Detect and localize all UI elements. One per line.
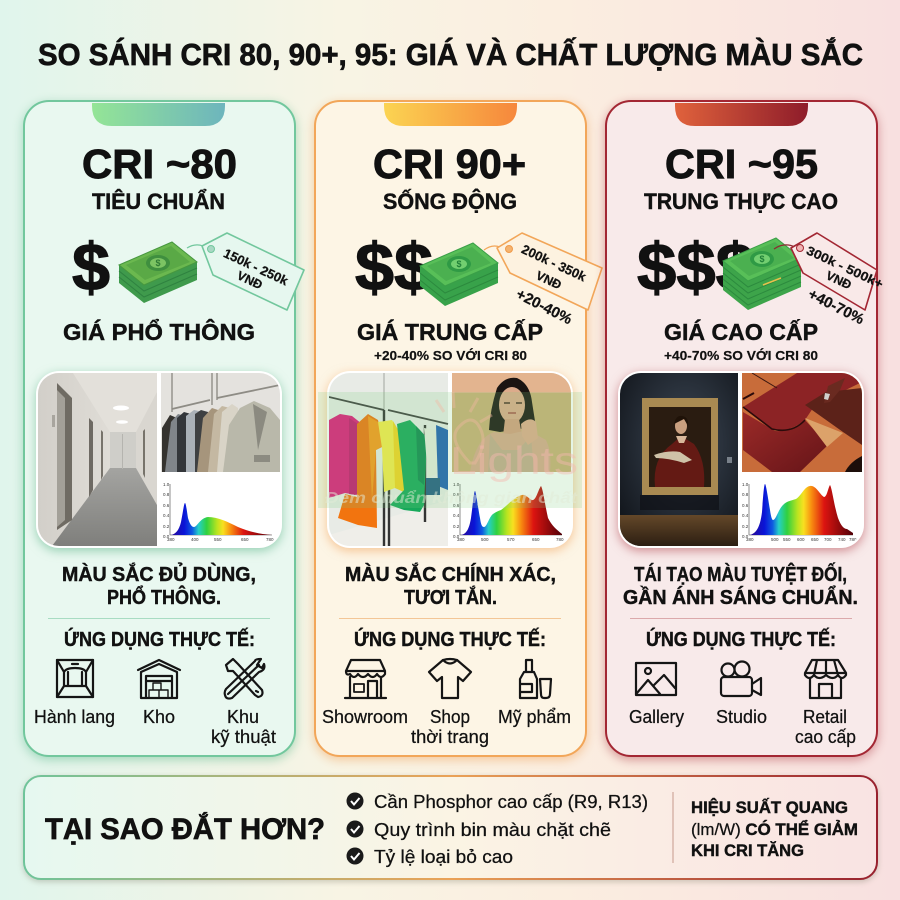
price level: GIÁ CAO CẤP	[664, 318, 818, 345]
card background	[606, 101, 877, 756]
title: SO SÁNH CRI 80, 90+, 95: GIÁ VÀ CHẤT LƯỢNG MÀU SẮC	[38, 36, 863, 72]
label: premium retail	[795, 707, 856, 747]
price tag: VNĐ	[235, 268, 265, 292]
icon: tools	[225, 659, 264, 699]
chart: CRI 95 spectrum: 380	[746, 537, 754, 542]
label: warehouse: Kho	[143, 707, 175, 727]
efficiency note: HIỆU SUẤT QUANG	[691, 798, 848, 817]
description: TÁI TẠO MÀU TUYỆT ĐỐI,	[634, 562, 847, 586]
chart: CRI 95 spectrum: 1.0	[742, 482, 749, 487]
chart: CRI 95 spectrum: 700	[824, 537, 832, 542]
comparison note: +20-40% SO VỚI CRI 80	[374, 348, 527, 363]
check item 3: Tỷ lệ loại bỏ cao	[374, 847, 513, 867]
comparison note: +40-70% SO VỚI CRI 80	[664, 348, 818, 363]
efficiency note: (lm/W) CÓ THỂ GIẢM	[691, 820, 858, 839]
icon: warehouse	[138, 660, 180, 698]
image collage	[618, 371, 864, 548]
label: cosmetics: Mỹ phẩm	[498, 707, 571, 727]
panel: CRI 90+	[315, 101, 602, 756]
check item 2: Quy trình bin màu chặt chẽ	[374, 820, 611, 840]
chart: CRI 90 spectrum: 0.2	[453, 524, 460, 529]
label: premium retail: Retail	[803, 707, 847, 727]
applications heading: ỨNG DỤNG THỰC TẾ:	[646, 627, 836, 651]
chart: CRI 95 spectrum: 650	[811, 537, 819, 542]
label: technical area: Khu	[227, 707, 259, 727]
price tag: VNĐ	[534, 268, 564, 292]
icon: video camera	[721, 662, 761, 696]
card background	[24, 101, 295, 756]
label: corridor: Hành lang	[34, 707, 115, 727]
icon: t-shirt	[429, 659, 471, 698]
chart: CRI 80 spectrum: 0.6	[163, 503, 170, 508]
chart: CRI 95 spectrum: 780	[849, 537, 857, 542]
description: PHỔ THÔNG.	[107, 585, 221, 609]
heading: CRI 80: CRI ~80	[82, 141, 237, 187]
icon: money stack	[119, 242, 197, 303]
top tab	[384, 103, 517, 126]
heading: CRI 90+: CRI 90+	[373, 141, 526, 187]
heading: CRI 95: CRI ~95	[665, 141, 818, 187]
photo: neutral clothes rack	[161, 373, 280, 472]
icon: corridor	[57, 660, 93, 697]
panel heading: TẠI SAO ĐẮT HƠN?	[45, 812, 325, 846]
chart: CRI 90 spectrum: 0.6	[453, 503, 460, 508]
dollar signs: $$	[355, 230, 433, 305]
watermark: Đem chuẩn không gian chất	[325, 489, 578, 507]
chart: CRI 80 spectrum: 0.2	[163, 524, 170, 529]
panel: why more expensive	[24, 776, 877, 879]
chart: CRI 95 spectrum: 500	[771, 537, 779, 542]
chart: CRI 80 spectrum: 780	[266, 537, 274, 542]
chart: CRI 80 spectrum: 650	[241, 537, 249, 542]
label: fashion shop: thời trang	[411, 727, 489, 747]
icon: money stack	[420, 243, 498, 306]
icon: money stack	[723, 238, 801, 310]
chart: CRI 80 spectrum: 550	[214, 537, 222, 542]
description	[345, 562, 556, 609]
price tag: 150k - 250k	[221, 245, 291, 289]
price tag: 300k - 500k+	[804, 243, 885, 291]
panel background	[24, 776, 877, 879]
checklist	[346, 792, 648, 867]
price tag: 200k - 350k	[519, 241, 589, 285]
dollar sign: $	[72, 230, 110, 305]
chart: CRI 80 spectrum: 380	[167, 537, 175, 542]
subheading: TIÊU CHUẨN	[92, 189, 225, 214]
price increase note: +40-70%	[805, 286, 867, 328]
price tag	[484, 233, 602, 310]
subheading: SỐNG ĐỘNG	[383, 188, 517, 214]
chart: CRI 95 spectrum	[742, 483, 856, 541]
chart: CRI 90 spectrum	[453, 483, 564, 541]
chart: CRI 90 spectrum: 780	[556, 537, 564, 542]
chart: CRI 95 spectrum: 0.8	[742, 492, 749, 497]
chart: CRI 90 spectrum: 650	[532, 537, 540, 542]
chart: CRI 90 spectrum: 570	[507, 537, 515, 542]
watermark	[318, 392, 582, 508]
applications heading: ỨNG DỤNG THỰC TẾ:	[64, 627, 255, 651]
chart: CRI 90 spectrum: 0.0	[453, 534, 460, 539]
chart: CRI 90 spectrum: 380	[457, 537, 465, 542]
label: showroom: Showroom	[322, 707, 408, 727]
description: GẦN ÁNH SÁNG CHUẨN.	[623, 586, 858, 609]
top tab	[92, 103, 225, 126]
icon: gallery picture	[636, 663, 676, 695]
photo: woman portrait	[452, 373, 571, 472]
price tag	[774, 233, 885, 310]
panel: CRI 80	[24, 101, 304, 756]
image collage	[327, 371, 573, 548]
subheading: TRUNG THỰC CAO	[644, 189, 838, 214]
chart: CRI 80 spectrum	[163, 483, 274, 541]
chart: CRI 90 spectrum: 1.0	[453, 482, 460, 487]
label: premium retail: cao cấp	[795, 727, 856, 747]
icon: cosmetics	[520, 660, 551, 698]
icon: showroom	[345, 660, 386, 698]
top tab	[675, 103, 808, 126]
efficiency note: KHI CRI TĂNG	[691, 841, 804, 860]
chart: CRI 95 spectrum: 550	[783, 537, 791, 542]
efficiency note	[691, 798, 858, 860]
chart: CRI 90 spectrum: 0.4	[453, 513, 460, 518]
photo: leather goods	[742, 373, 862, 472]
description: MÀU SẮC CHÍNH XÁC,	[345, 562, 556, 586]
chart: CRI 95 spectrum: 0.0	[742, 534, 749, 539]
chart: CRI 80 spectrum: 400	[191, 537, 199, 542]
chart: CRI 90 spectrum: 0.8	[453, 492, 460, 497]
description: MÀU SẮC ĐỦ DÙNG,	[62, 562, 256, 586]
dollar signs: $$$	[637, 230, 755, 305]
chart: CRI 80 spectrum: 0.4	[163, 513, 170, 518]
photo: colorful clothes	[329, 373, 448, 546]
label: fashion shop	[411, 707, 489, 747]
chart: CRI 95 spectrum: 0.4	[742, 513, 749, 518]
description	[62, 562, 256, 609]
icon: retail store	[805, 660, 846, 698]
chart: CRI 95 spectrum: 0.6	[742, 503, 749, 508]
applications heading: ỨNG DỤNG THỰC TẾ:	[354, 627, 546, 651]
label: technical area	[211, 707, 276, 747]
photo: corridor	[38, 373, 157, 546]
chart: CRI 90 spectrum: 500	[481, 537, 489, 542]
watermark: Lights	[450, 440, 578, 483]
chart: CRI 80 spectrum: 0.0	[163, 534, 170, 539]
chart: CRI 80 spectrum: 1.0	[163, 482, 170, 487]
chart: CRI 95 spectrum: 0.2	[742, 524, 749, 529]
label: gallery: Gallery	[629, 707, 684, 727]
price tag	[187, 233, 304, 310]
description	[623, 562, 858, 609]
price tag: VNĐ	[824, 268, 854, 292]
label: studio: Studio	[716, 707, 767, 727]
price level: GIÁ PHỔ THÔNG	[63, 318, 255, 345]
label: fashion shop: Shop	[430, 707, 470, 727]
price increase note: +20-40%	[513, 286, 575, 328]
image collage	[36, 371, 282, 548]
chart: CRI 95 spectrum: 740	[838, 537, 846, 542]
label: technical area: kỹ thuật	[211, 727, 276, 747]
card background	[315, 101, 586, 756]
check item 1: Cần Phosphor cao cấp (R9, R13)	[374, 792, 648, 812]
description: TƯƠI TẮN.	[404, 585, 497, 609]
panel: CRI 95	[606, 101, 885, 756]
price level: GIÁ TRUNG CẤP	[357, 318, 543, 345]
chart: CRI 80 spectrum: 0.8	[163, 492, 170, 497]
chart: CRI 95 spectrum: 600	[797, 537, 805, 542]
photo: gallery painting	[620, 373, 738, 546]
